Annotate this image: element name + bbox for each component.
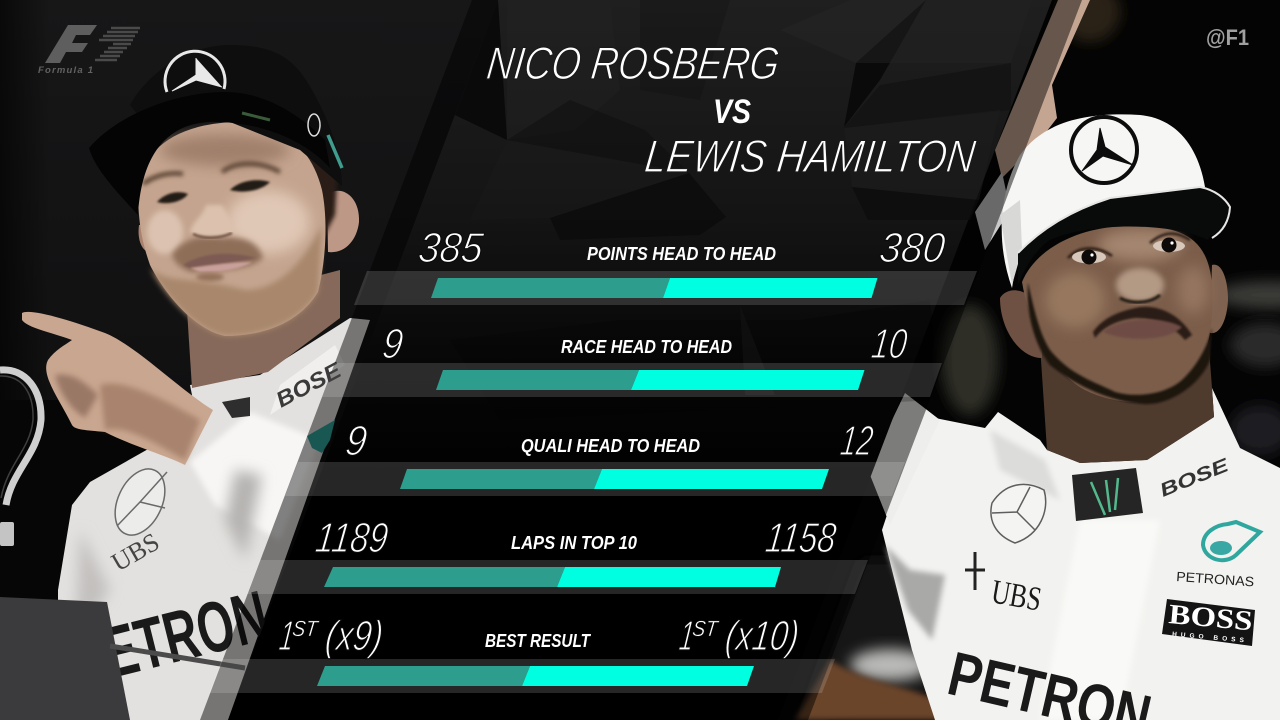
logo: chest star <box>105 461 175 543</box>
value: 1st x10: ST <box>691 616 720 641</box>
ears <box>1000 265 1228 358</box>
eyes <box>157 192 188 203</box>
photo: Lewis Hamilton <box>868 0 1280 720</box>
raised finger <box>995 0 1090 178</box>
label: BEST RESULT <box>485 630 591 651</box>
cap star <box>1071 117 1137 183</box>
race suit <box>58 318 370 720</box>
logo: Formula 1 <box>38 25 140 76</box>
bar <box>317 666 754 686</box>
podium block <box>0 597 130 720</box>
title: Lewis Hamilton: LEWIS HAMILTON <box>642 130 979 182</box>
eyes <box>1072 250 1106 264</box>
brows <box>1068 234 1190 258</box>
BOSS badge: HUGO BOSS <box>1172 631 1245 644</box>
race suit <box>868 388 1280 720</box>
text: BOSE collar: BOSE <box>1157 455 1233 502</box>
row 1: points head to head <box>354 224 977 305</box>
value: 9: 9 <box>343 417 370 464</box>
nose <box>190 205 234 237</box>
mouth <box>183 254 257 268</box>
monster collar patch <box>1072 468 1143 521</box>
value: 12: 12 <box>838 417 876 464</box>
row 3: quali head to head <box>285 417 905 496</box>
row 2: race head to head <box>322 320 942 397</box>
UBS logo: UBS <box>989 573 1044 619</box>
value: 1st x9 <box>277 612 386 659</box>
handle: @F1: @F1 <box>1206 25 1249 50</box>
ear <box>327 191 359 252</box>
text: PETRONAS: PETRONAS <box>1176 569 1255 589</box>
label: QUALI HEAD TO HEAD <box>521 435 700 456</box>
lips <box>1103 320 1182 339</box>
moustache <box>1093 307 1192 340</box>
logo: Formula 1: Formula 1 <box>38 65 93 76</box>
brows <box>143 164 280 184</box>
trophy <box>0 370 41 546</box>
value: 1st x10: (x10) <box>723 612 802 659</box>
left ear sliver <box>139 225 148 252</box>
value: 1st x10: 1 <box>677 612 697 659</box>
bar <box>431 278 878 298</box>
photo: Nico Rosberg <box>0 45 370 720</box>
translucent panel edge <box>200 0 1082 720</box>
hair <box>305 150 337 240</box>
white sleeve in edge stripe <box>975 172 1010 250</box>
value: 1st x9: ST <box>291 616 320 641</box>
cap: Hamilton <box>1000 114 1230 288</box>
neck <box>187 270 340 388</box>
value: 1189: 1189 <box>313 514 391 561</box>
moustache shade <box>172 236 263 272</box>
stubble <box>150 225 322 336</box>
chest star logo <box>991 484 1046 543</box>
text: ETRON: ETRON <box>97 576 276 694</box>
value: 1st x10 <box>677 612 802 659</box>
value: 1158: 1158 <box>763 514 839 561</box>
label: LAPS IN TOP 10 <box>511 532 638 553</box>
face <box>138 122 325 336</box>
central panel <box>228 0 1052 720</box>
value: 10: 10 <box>869 320 910 367</box>
text: UBS: UBS <box>106 527 164 577</box>
label: RACE HEAD TO HEAD <box>561 336 732 357</box>
background: right photo <box>760 0 1280 720</box>
bar <box>400 469 829 489</box>
beard <box>1028 283 1212 404</box>
bar <box>436 370 864 390</box>
wire <box>110 646 245 668</box>
BOSS badge: BOSS <box>1167 599 1254 637</box>
UBS logo <box>965 552 1044 619</box>
value: 1st x9: (x9) <box>323 612 386 659</box>
title <box>484 37 979 182</box>
petronas logo <box>1203 522 1260 560</box>
row 5: best result <box>209 612 835 693</box>
value: 1st x9: 1 <box>277 612 297 659</box>
face <box>1022 226 1212 404</box>
label: POINTS HEAD TO HEAD <box>587 243 776 264</box>
value: 9: 9 <box>380 320 406 367</box>
petronas ghost <box>307 420 335 453</box>
cap star <box>165 51 225 92</box>
bar <box>324 567 781 587</box>
row 4: laps in top 10 <box>247 514 868 594</box>
title: vs: VS <box>713 93 751 131</box>
title: Nico Rosberg: NICO ROSBERG <box>484 37 782 89</box>
text: BOSE: BOSE <box>272 357 346 412</box>
background: left photo <box>0 0 520 720</box>
hand <box>22 312 213 465</box>
neck <box>1040 335 1214 463</box>
BOSS badge <box>1162 599 1255 646</box>
low-poly facets <box>450 0 1032 420</box>
value: 385: 385 <box>416 224 486 271</box>
cap: Rosberg <box>89 45 342 215</box>
value: 380: 380 <box>877 224 948 271</box>
